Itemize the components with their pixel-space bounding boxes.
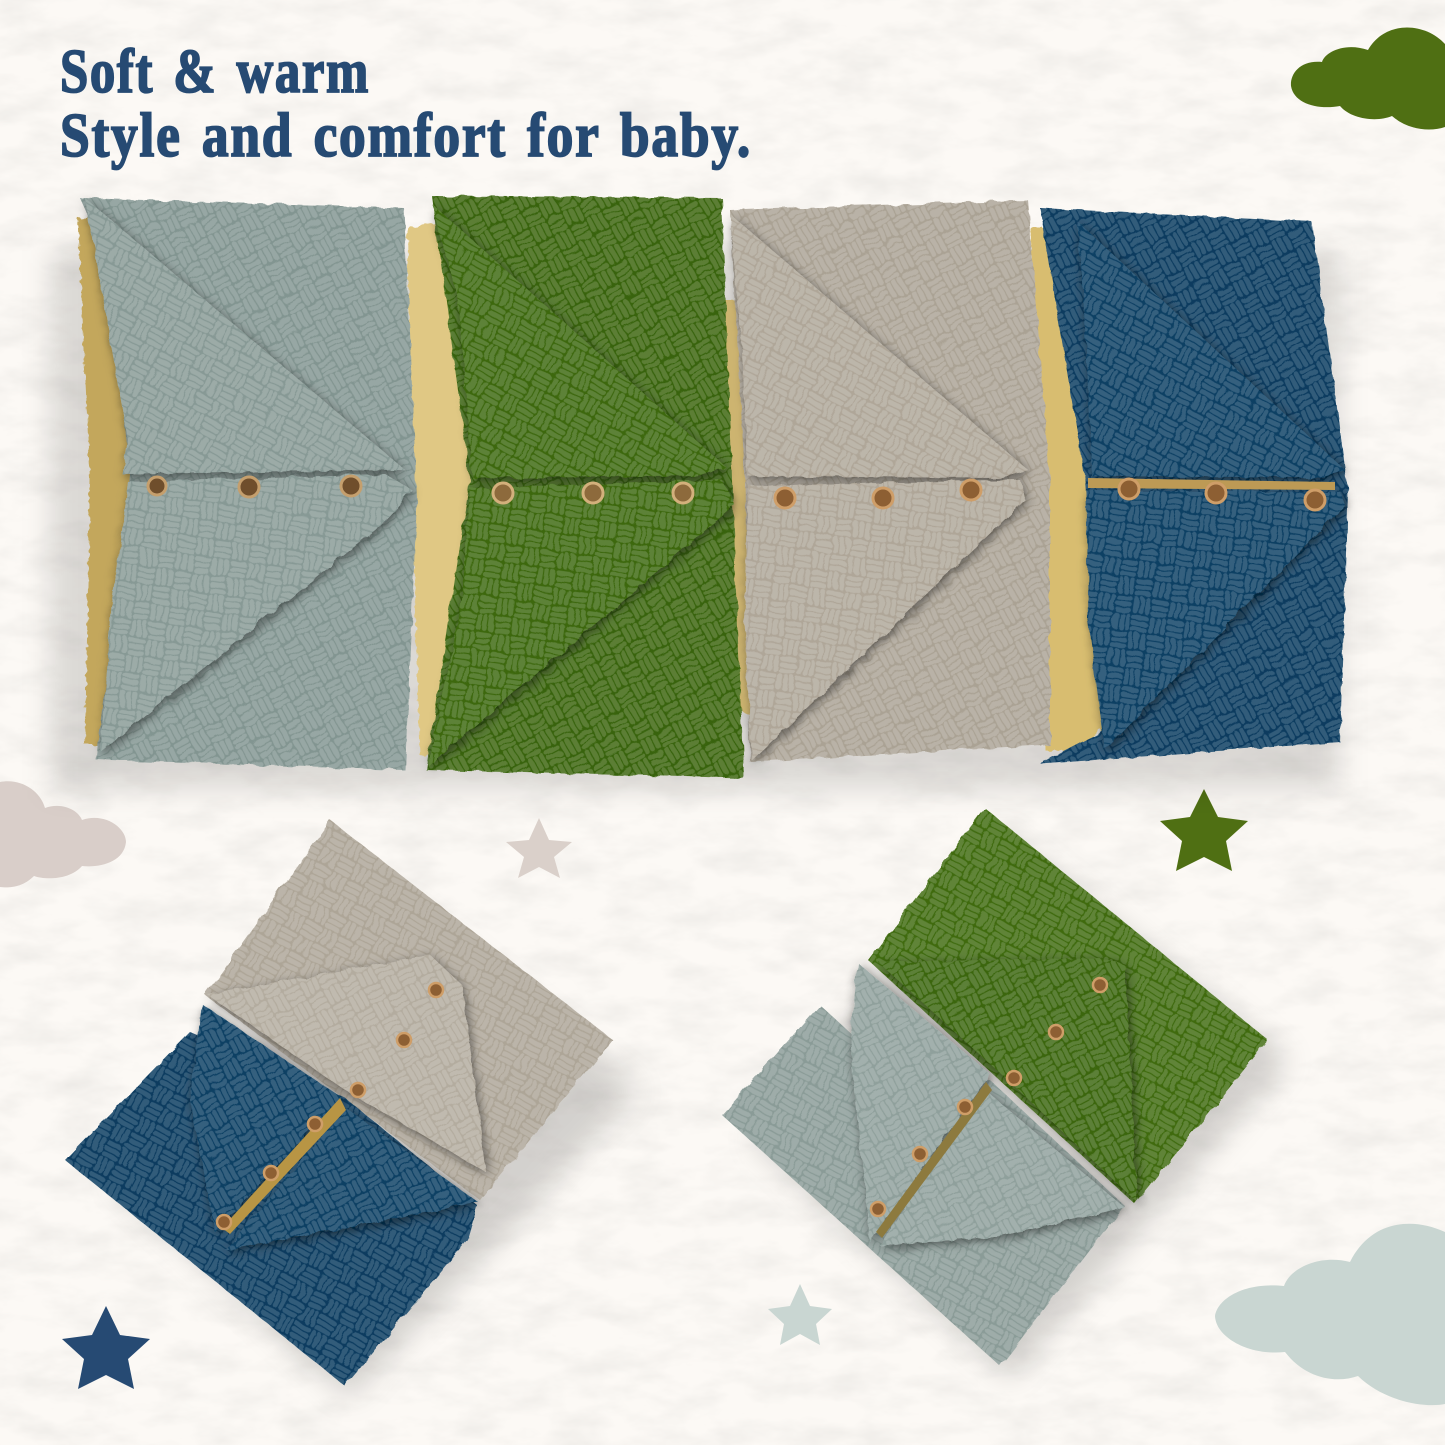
lower right shadow bbox=[750, 830, 1290, 1380]
sage blanket body bbox=[722, 1005, 1125, 1366]
buttons bbox=[775, 480, 981, 508]
beige blanket body bbox=[205, 820, 613, 1200]
green blanket body bbox=[868, 808, 1268, 1204]
buttons bbox=[217, 983, 443, 1229]
star: navy bbox=[62, 1306, 150, 1389]
opening strip bbox=[222, 1098, 346, 1234]
buttons bbox=[148, 476, 361, 497]
lower left shadow bbox=[110, 900, 640, 1400]
title bbox=[60, 38, 752, 170]
buttons bbox=[493, 483, 693, 503]
opening strip bbox=[876, 1082, 992, 1238]
lower right pair: green and sage blankets bbox=[722, 808, 1268, 1366]
cloud: bottom right pale teal bbox=[1215, 1224, 1445, 1405]
buttons bbox=[871, 978, 1107, 1216]
navy blanket body bbox=[65, 1032, 478, 1386]
cloud: left beige bbox=[0, 781, 126, 887]
cloud: top right green bbox=[1291, 27, 1445, 129]
top row shadow bbox=[50, 250, 1340, 790]
navy upper flap bbox=[190, 1004, 342, 1232]
sage lower flap bbox=[880, 1090, 1125, 1246]
star: green bbox=[1160, 789, 1248, 871]
star: beige bbox=[506, 818, 572, 878]
sage upper flap bbox=[850, 963, 990, 1242]
beige flap bbox=[208, 955, 486, 1172]
green flap bbox=[878, 958, 1137, 1202]
blanket 2: green bbox=[407, 196, 744, 778]
blanket 4: navy teal bbox=[1030, 208, 1348, 764]
lower left pair: beige and navy blankets bbox=[65, 820, 613, 1386]
title: Soft & warm bbox=[60, 38, 370, 106]
blanket 1: sage bbox=[78, 198, 417, 770]
star: pale teal bbox=[768, 1284, 832, 1345]
navy lower flap bbox=[225, 1108, 478, 1250]
blanket 3: beige bbox=[718, 200, 1050, 762]
title: Style and comfort for baby. bbox=[60, 102, 752, 170]
tan opening strip bbox=[1088, 478, 1335, 490]
buttons bbox=[1119, 479, 1325, 510]
